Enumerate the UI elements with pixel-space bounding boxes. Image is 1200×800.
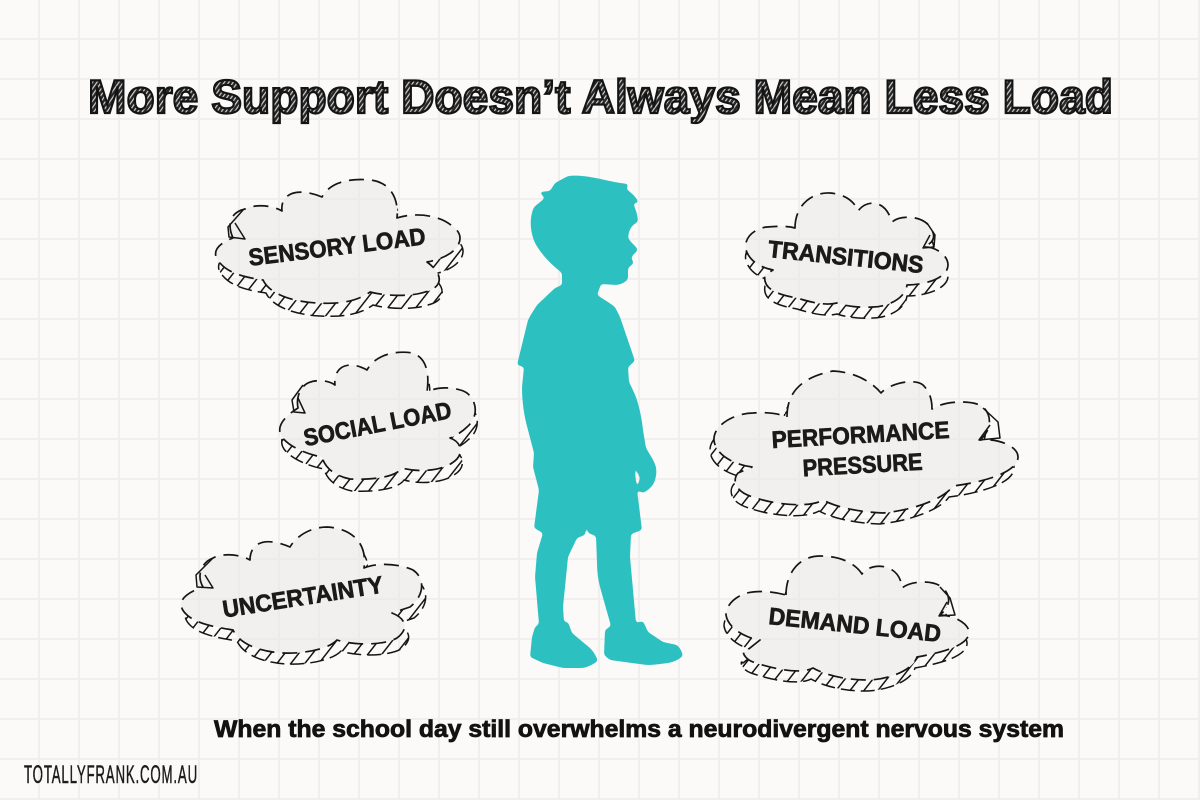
label: demand load: DEMAND LOAD [767,603,942,648]
child silhouette [517,176,683,668]
label: performance pressure [771,417,950,482]
panel: social load cloud [280,352,477,491]
title: More Support Doesn’t Always Mean Less Load [88,70,1113,123]
label: sensory load: SENSORY LOAD [247,223,427,272]
label: uncertainty: UNCERTAINTY [221,572,385,624]
footer url: TOTALLYFRANK.COM.AU [24,761,198,789]
panel: uncertainty cloud [181,527,426,664]
panel: transitions cloud [746,193,948,318]
label: performance pressure: PERFORMANCE [771,417,950,454]
label: social load: SOCIAL LOAD [301,397,454,452]
caption: When the school day still overwhelms a neurodivergent nervous system [214,716,1064,743]
panel: performance pressure cloud [710,371,1018,524]
panel: demand load cloud [724,556,969,691]
label: transitions: TRANSITIONS [767,236,925,279]
label: performance pressure: PRESSURE [802,449,923,482]
panel: sensory load cloud [216,180,463,316]
